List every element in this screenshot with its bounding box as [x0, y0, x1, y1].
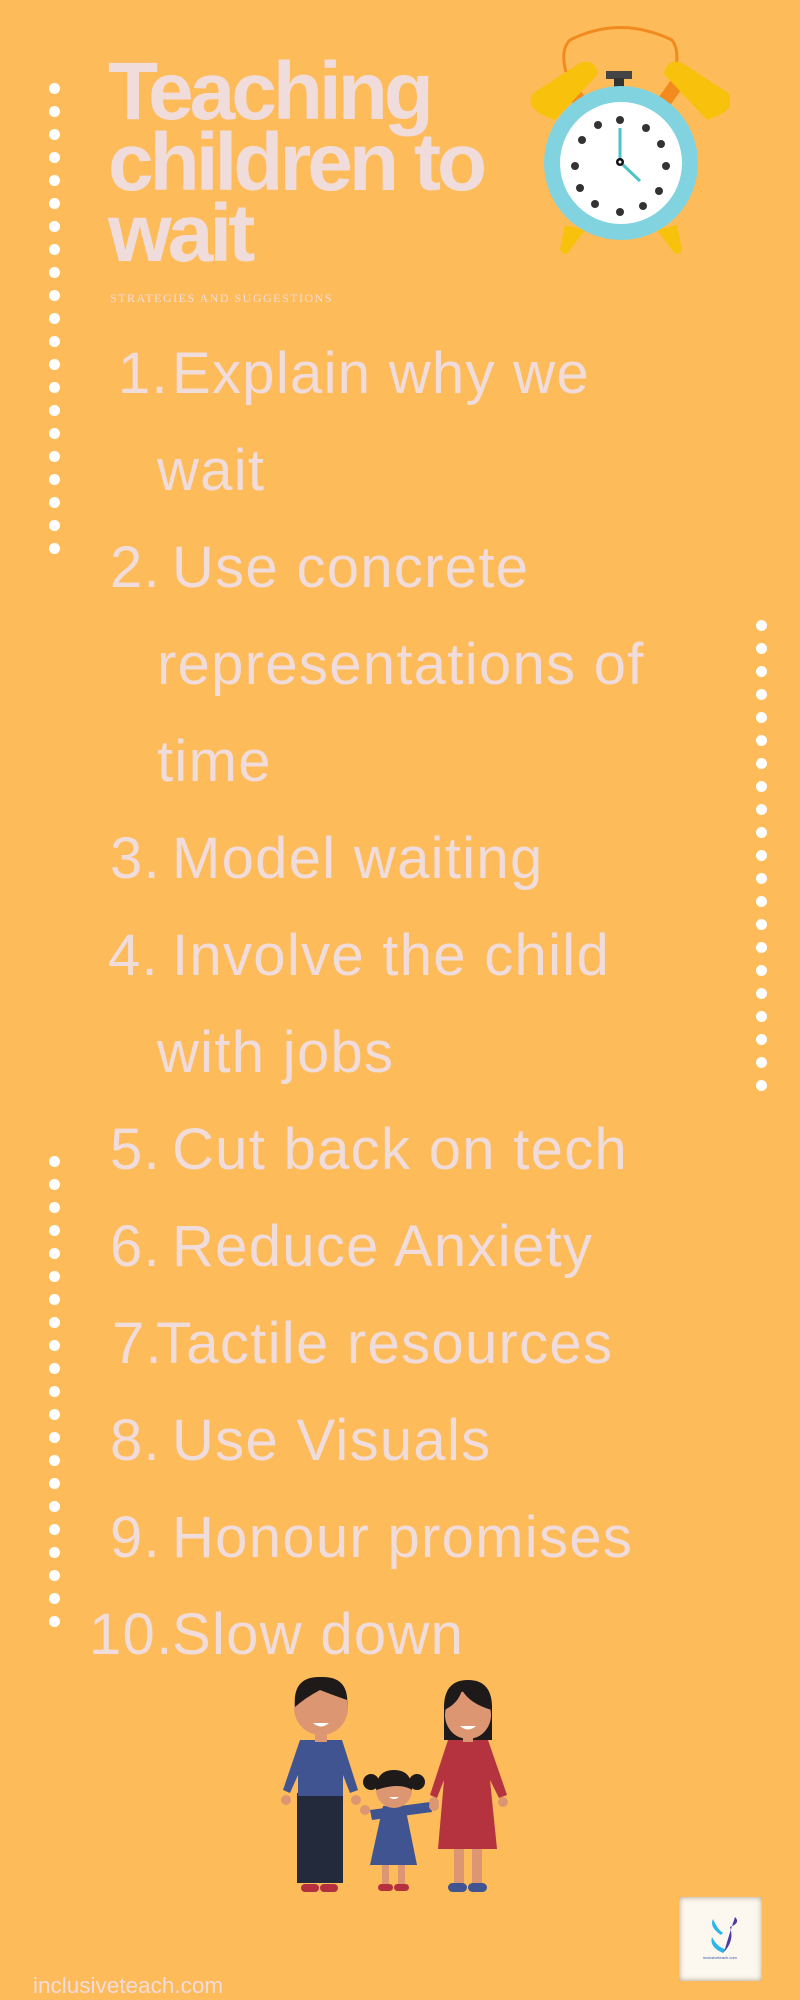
item 10: 10.: [89, 1602, 174, 1667]
list of strategies: Explain why we: [172, 341, 590, 406]
dotted line: left bottom: [49, 1156, 60, 1627]
item 10: [89, 1602, 464, 1667]
father: [281, 1677, 361, 1892]
list of strategies: Involve the child: [172, 923, 610, 988]
item 1: [118, 341, 590, 406]
child: [360, 1770, 439, 1891]
item 2 continued 2: time: [157, 729, 272, 794]
mother: [429, 1680, 508, 1892]
item 2: [110, 535, 529, 600]
item 6: [110, 1214, 593, 1279]
subtitle: STRATEGIES AND SUGGESTIONS: [110, 291, 333, 305]
item 2 continued: representations of: [157, 632, 645, 697]
logo badge: inclusiveteach.com: [703, 1955, 738, 1960]
item 4 continued: with jobs: [157, 1020, 394, 1085]
item 7: 7.: [112, 1311, 163, 1376]
illustration: family: [281, 1677, 508, 1892]
list of strategies: Use Visuals: [172, 1408, 491, 1473]
item 5: 5.: [110, 1117, 161, 1182]
item 7: [112, 1311, 613, 1376]
item 1: 1.: [118, 341, 169, 406]
item 8: [110, 1408, 491, 1473]
footer url: inclusiveteach.com: [33, 1973, 223, 1998]
item 4: [108, 923, 610, 988]
item 4: 4.: [108, 923, 159, 988]
list of strategies: Tactile resources: [156, 1311, 613, 1376]
list of strategies: Slow down: [172, 1602, 464, 1667]
item 1 continued: wait: [157, 438, 265, 503]
item 5: [110, 1117, 628, 1182]
logo badge: [679, 1897, 762, 1981]
item 6: 6.: [110, 1214, 161, 1279]
dotted line: right: [756, 620, 767, 1091]
title: Teaching children to wait: [108, 46, 483, 279]
item 3: 3.: [110, 826, 161, 891]
icon: alarm clock: [530, 26, 730, 254]
dotted line: left top: [49, 83, 60, 554]
list of strategies: Honour promises: [172, 1505, 633, 1570]
list of strategies: Cut back on tech: [172, 1117, 628, 1182]
item 3: [110, 826, 544, 891]
list of strategies: Reduce Anxiety: [172, 1214, 593, 1279]
list of strategies: Model waiting: [172, 826, 544, 891]
item 9: 9.: [110, 1505, 161, 1570]
list of strategies: Use concrete: [172, 535, 529, 600]
list of strategies: [89, 341, 645, 1667]
item 8: 8.: [110, 1408, 161, 1473]
item 9: [110, 1505, 633, 1570]
item 2: 2.: [110, 535, 161, 600]
